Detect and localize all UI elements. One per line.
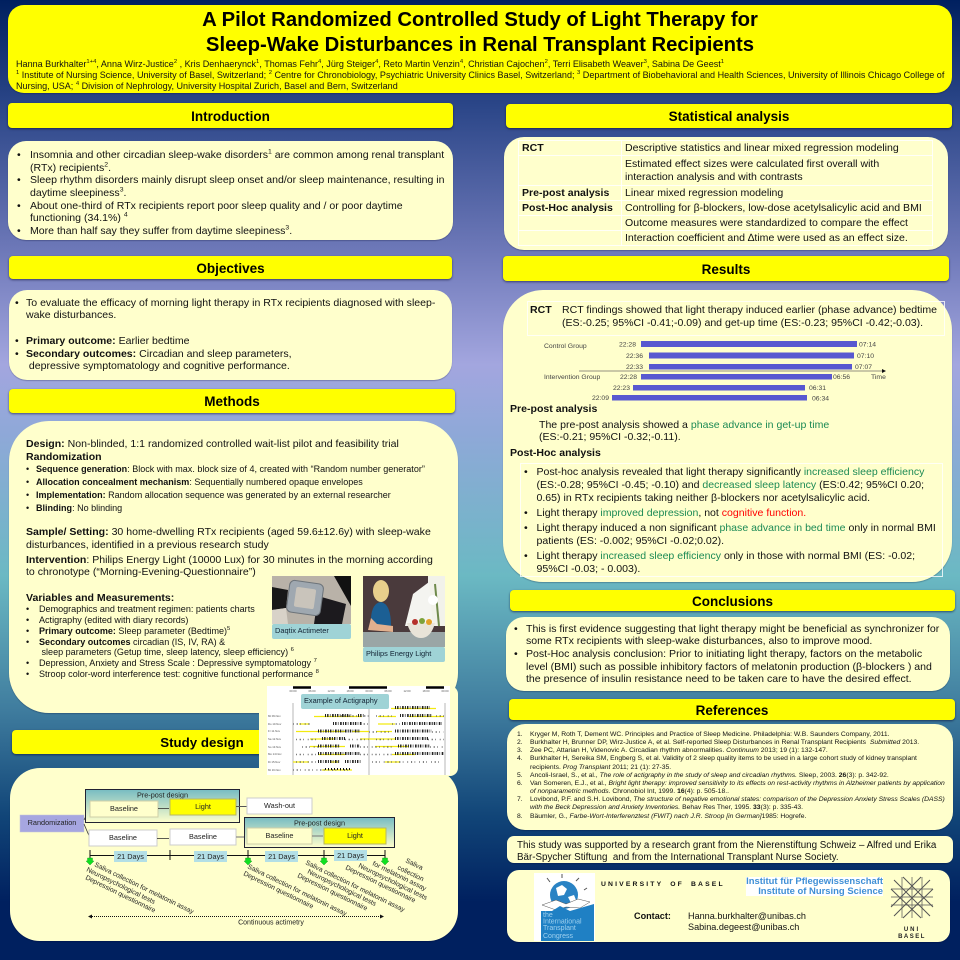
panel: funding <box>507 836 953 863</box>
21 days labels: 21 Days <box>117 852 144 861</box>
pre-post design group 1: Baseline <box>110 804 138 813</box>
caption <box>272 624 351 639</box>
actigraphy figure: 18:00 <box>422 689 430 693</box>
control baseline boxes: Baseline <box>189 832 217 841</box>
sleep timing bar chart: 22:09 <box>592 395 609 402</box>
statistical analysis table: Linear mixed regression modeling <box>625 187 783 199</box>
sleep timing bar chart: 22:36 <box>626 353 643 360</box>
reference list: 3. <box>517 747 523 754</box>
statistical analysis table: Interaction coefficient and ∆time were used as an effect size. <box>625 232 908 244</box>
reference list: Zee PC, Attarian H, Videnovic A. Circadian rhythm abnormalities. Continuum 2013; 19 (1): 132-147. <box>530 747 828 754</box>
design and randomization <box>26 438 399 463</box>
heading: statistical analysis <box>506 104 952 128</box>
measurements at second time point: Saliva collection for melatonin assay <box>246 864 348 918</box>
heading: statistical analysis: Statistical analysis <box>669 109 789 124</box>
post-hoc bullets: • <box>524 550 528 562</box>
conclusions bullets: Post-Hoc analysis conclusion: Prior to initiating light therapy, factors on the metabolic <box>526 648 922 660</box>
authors and affiliations: Hanna Burkhalter1+4, Anna Wirz-Justice2 , Kris Denhaerynck1, Thomas Fehr4, Jürg Steiger4, Reto Martin Venzin4, Christian Cajochen2, Terri Elisabeth Weaver3, Sabina De Geest1 <box>16 58 724 68</box>
intervention: Intervention: Philips Energy Light (10000 Lux) for 30 minutes in the morning according <box>26 554 433 566</box>
sleep timing bar chart: 06:34 <box>812 396 829 402</box>
reference list: 1. <box>517 731 523 738</box>
intervention <box>26 554 433 578</box>
photo: Philips Energy Light <box>363 576 445 662</box>
randomization list: Allocation concealment mechanism: Sequentially numbered opaque envelopes <box>36 477 363 487</box>
sample and setting: disturbances, identified in a previous research study <box>26 539 269 551</box>
heading: objectives: Objectives <box>196 261 265 276</box>
reference list: 2. <box>517 739 523 746</box>
introduction bullets: More than half say they suffer from daytime sleepiness3. <box>30 225 292 237</box>
randomization list: • <box>26 477 29 487</box>
actigraphy figure: 00:00 <box>442 689 449 693</box>
measurements at first time point: Depression questionnaire <box>84 875 157 915</box>
reference list: Burkhalter H, Sereika SM, Engberg S, et al. Validity of 2 sleep quality items to be used in a large cohort study of kidney transplant <box>530 755 917 762</box>
post-hoc bullets <box>524 466 936 575</box>
reference list: recipients. Prog Transplant 2011; 21 (1): 27-35. <box>530 764 671 771</box>
post-hoc bullets: Light therapy increased sleep efficiency only in those with normal BMI (ES: -0.02; <box>536 550 915 562</box>
caption: Daqtix Actimeter <box>275 626 329 635</box>
title panel <box>8 5 952 93</box>
objectives bullets: • <box>15 335 19 347</box>
actigraphy figure: 18:00 <box>346 689 354 693</box>
21 days labels: 21 Days <box>337 851 364 860</box>
study design flow diagram <box>20 789 429 926</box>
pre-post text: The pre-post analysis showed a phase advance in get-up time <box>539 418 829 430</box>
heading: results: Results <box>702 262 750 277</box>
heading: results <box>503 256 949 281</box>
reference list: 8. <box>517 813 523 820</box>
institute name <box>746 877 883 896</box>
actigraphy figure: 12:00 <box>404 689 411 693</box>
heading: study design <box>12 730 392 754</box>
pre-post design group 1: Pre-post design <box>137 790 188 800</box>
intervention: to chronotype (“Morning-Evening-Questionnaire”) <box>26 566 256 578</box>
variables list: • <box>26 604 29 614</box>
randomization list: Blinding: No blinding <box>36 503 122 513</box>
reference list: Bäumler, G., Farbe-Wort-Interferenztest (FWIT) nach J.R. Stroop [in German]1985: Hogrefe. <box>530 813 806 820</box>
sleep timing bar chart: 22:28 <box>620 374 637 381</box>
statistical analysis table <box>518 140 933 246</box>
randomization list: • <box>26 464 29 474</box>
institute name: Institut für Pflegewissenschaft <box>746 876 883 887</box>
statistical analysis table: interaction analysis and with contrasts <box>625 170 803 182</box>
title: Sleep-Wake Disturbances in Renal Transplant Recipients <box>206 34 754 56</box>
pre-post design group 1 <box>86 790 240 822</box>
post-hoc bullets: Light therapy induced a non significant phase advance in bed time only in normal BMI <box>536 522 936 534</box>
measurements at fourth time point: Neuropsychological tests <box>357 863 429 902</box>
variables list <box>26 604 319 679</box>
randomization box: Randomization <box>28 818 76 827</box>
measurements at third time point: Neuropsychological tests <box>306 869 378 908</box>
actigraphy figure: 06:00 <box>384 689 392 693</box>
continuous actimetry arrow: Continuous actimetry <box>238 920 304 926</box>
panel: introduction <box>8 141 453 240</box>
RCT finding <box>530 304 937 329</box>
post-hoc bullets: Post-hoc analysis revealed that light therapy significantly increased sleep efficiency <box>536 466 924 478</box>
introduction bullets: • <box>17 174 21 186</box>
sleep timing bar chart: 07:14 <box>859 342 876 348</box>
actigraphy figure: Sa 12.Nov <box>268 737 282 741</box>
pre-post design group 2: Pre-post design <box>294 818 345 828</box>
actigraphy figure: Do 10.Nov <box>268 722 282 726</box>
conclusions bullets: level (BMI) such as possible inhibitory factors of melatonin production (β-blockers ) and <box>526 661 932 673</box>
logo: International Transplant Congress: Congress <box>543 933 573 940</box>
post-hoc heading: Post-Hoc analysis <box>510 446 601 458</box>
conclusions bullets: This is first evidence suggesting that light therapy might be beneficial as synchronizer for <box>526 623 939 635</box>
randomization list: Implementation: Random allocation sequence was generated by an external researcher <box>36 490 391 500</box>
logo: International Transplant Congress: the <box>543 912 553 919</box>
sleep timing bar chart: 22:28 <box>619 342 636 348</box>
reference list <box>517 731 945 820</box>
reference list: with the Beck Depression and Anxiety Inventories. Behav Res Ther, 1995. 33(3): p. 335-43. <box>530 804 803 811</box>
caption <box>363 647 445 662</box>
introduction bullets: functioning (34.1%) 4 <box>30 212 128 224</box>
variables list: • <box>26 669 29 679</box>
funding text <box>517 840 936 862</box>
actigraphy figure: Fr 11.Nov <box>268 729 281 733</box>
actigraphy figure: 12:00 <box>328 689 335 693</box>
conclusions bullets <box>514 623 940 685</box>
variables heading: Variables and Measurements: <box>26 592 174 604</box>
objectives bullets: • <box>15 296 19 308</box>
actigraphy figure: Mi 16.Nov <box>268 768 281 772</box>
wash-out box <box>236 798 312 814</box>
variables list: • <box>26 637 29 647</box>
title: A Pilot Randomized Controlled Study of Light Therapy for <box>202 9 758 31</box>
funding text: Bär-Spycher Stiftung and from the International Transplant Nurse Society. <box>517 852 839 862</box>
institute name: Institute of Nursing Science <box>758 886 883 897</box>
post-hoc bullets: • <box>524 522 528 534</box>
variables list: Demographics and treatment regimen: patients charts <box>39 604 255 614</box>
sleep timing bar chart: 07:07 <box>855 364 872 371</box>
statistical analysis table: Outcome measures were standardized to compare the effect <box>625 217 908 229</box>
logo: International Transplant Congress <box>534 873 595 941</box>
heading: methods <box>9 389 455 413</box>
design and randomization: Design: Non-blinded, 1:1 randomized controlled wait-list pilot and feasibility trial <box>26 438 399 450</box>
heading: objectives <box>9 256 452 279</box>
contact emails: Sabina.degeest@unibas.ch <box>688 922 799 932</box>
measurements at first time point: Neuropsychological tests <box>85 867 157 906</box>
variables list: • <box>26 658 29 668</box>
panel: results <box>503 290 952 582</box>
objectives bullets: • <box>15 348 19 360</box>
variables list: • <box>26 626 29 636</box>
introduction bullets: Sleep rhythm disorders mainly disrupt sleep onset and/or sleep maintenance, resulting in <box>30 174 444 186</box>
logo: University of Basel emblem <box>890 876 934 940</box>
introduction bullets: (RTx) recipients2. <box>30 161 111 174</box>
reference list: Kryger M, Roth T, Dement WC. Principles and Practice of Sleep Medicine. Philadelphia: W.B. Saunders Company, 2011. <box>530 731 890 738</box>
measurements at fourth time point: collection <box>396 865 425 883</box>
variables list: Depression, Anxiety and Stress Scale : Depressive symptomatology 7 <box>39 658 317 668</box>
post-hoc bullets: patients (ES: -0.002; 95%CI -0.02;0.02). <box>536 535 724 547</box>
green arrows <box>86 858 389 865</box>
introduction bullets: daytime sleepiness3. <box>30 186 126 199</box>
control baseline boxes: Baseline <box>109 833 137 842</box>
actigraphy figure: 06:00 <box>308 689 316 693</box>
pre-post text: (ES:-0.21; 95%CI -0.32;-0.11). <box>539 431 681 443</box>
variables list: Primary outcome: Sleep parameter (Bedtime)5 <box>39 626 230 636</box>
contact label: Contact: <box>634 911 671 921</box>
sleep timing bar chart: Control Group <box>544 343 587 350</box>
variables list: • <box>26 615 29 625</box>
reference list: Burkhalter H, Brunner DP, Wirz-Justice A, et al. Self-reported Sleep Disturbances in Renal Transplant Recipients Submitted 2013. <box>530 739 919 746</box>
pre-post heading: Pre-post analysis <box>510 403 597 415</box>
contact emails: Hanna.burkhalter@unibas.ch <box>688 911 806 921</box>
post-hoc bullets: • <box>524 466 528 478</box>
sleep timing bar chart <box>544 341 886 402</box>
panel: statistical analysis <box>504 137 948 250</box>
RCT finding: (ES:-0.25; 95%CI -0.41;-0.09) and get-up time (ES:-0.23; 95%CI -0.42;-0.03). <box>562 317 923 329</box>
logo: University of Basel emblem: BASEL <box>898 934 926 940</box>
sleep timing bar chart: 22:33 <box>626 364 643 371</box>
sample and setting <box>26 526 431 551</box>
caption: Example of Actigraphy <box>304 696 378 705</box>
21 days labels <box>114 850 367 862</box>
actigraphy figure: So 13.Nov <box>268 745 282 749</box>
logo: International Transplant Congress: Transplant <box>543 925 576 932</box>
funding text: This study was supported by a research grant from the Nierenstiftung Schweiz – Alfred und Erika <box>517 840 936 850</box>
panel: methods <box>9 421 458 713</box>
objectives bullets: To evaluate the efficacy of morning light therapy in RTx recipients diagnosed with sleep- <box>26 296 435 308</box>
sleep timing bar chart: 06:56 <box>833 374 850 381</box>
sample and setting: Sample/ Setting: 30 home-dwelling RTx recipients (aged 59.6±12.6y) with sleep-wake <box>26 526 431 538</box>
reference list: 7. <box>517 796 523 803</box>
variables list: sleep parameters (Getup time, sleep latency, sleep efficiency) 6 <box>42 647 294 657</box>
panel: conclusions <box>506 617 950 691</box>
randomization list: Sequence generation: Block with max. block size of 4, created with “Random number generator” <box>36 464 425 474</box>
pre-post design group 2 <box>244 818 394 848</box>
conclusions bullets: • <box>514 648 518 660</box>
actigraphy figure: Mi 09.Nov <box>268 714 281 718</box>
variables list: Actigraphy (edited with diary records) <box>39 615 188 625</box>
introduction bullets: Insomnia and other circadian sleep-wake disorders1 are common among renal transplant <box>30 148 444 161</box>
measurements at second time point: Depression questionnaire <box>242 871 315 911</box>
randomization list: • <box>26 490 29 500</box>
actigraphy figure <box>259 686 458 776</box>
heading: study design: Study design <box>160 735 244 750</box>
post-hoc bullets: (ES:-0.28; 95%CI -0.45; -0.10) and decreased sleep latency (ES:0.42; 95%CI 0.20; <box>536 479 924 491</box>
timeline <box>90 850 385 860</box>
authors and affiliations: 1 Institute of Nursing Science, University of Basel, Switzerland; 2 Centre for Chronobiology, Psychiatric University Clinics Basel, Switzerland; 3 Department of Biobehavioral and Health Sciences, University of Illinois Chicago College of <box>16 69 944 80</box>
authors and affiliations <box>16 58 944 91</box>
conclusions bullets: some RTx recipients with sleep-wake disturbances, also to improve mood. <box>526 635 872 647</box>
variables list: Stroop color-word interference test: cognitive functional performance 8 <box>39 669 319 679</box>
panel: references <box>507 724 953 830</box>
pre-post text <box>539 418 829 443</box>
branch arrows <box>84 808 90 838</box>
heading: references: References <box>696 703 768 718</box>
logo: University of Basel emblem: UNI <box>904 927 920 933</box>
caption: Philips Energy Light <box>366 649 431 658</box>
sleep timing bar chart: Time <box>871 374 886 381</box>
measurements at fourth time point: Depression questionnaire <box>344 865 417 905</box>
heading: methods: Methods <box>204 394 260 409</box>
reference list: 4. <box>517 755 523 762</box>
introduction bullets: • <box>17 225 21 237</box>
measurements at first time point: Saliva collection for melatonin assay <box>93 862 195 916</box>
actigraphy figure: 00:00 <box>366 689 373 693</box>
photo: Daqtix actimeter <box>272 576 351 639</box>
21 days labels: 21 Days <box>268 852 295 861</box>
reference list: of nonparametric methods. Chronobiol Int, 1999. 16(4): p. 505-18.. <box>530 788 729 795</box>
heading: conclusions: Conclusions <box>692 594 773 609</box>
statistical analysis table: Descriptive statistics and linear mixed regression modeling <box>625 142 899 154</box>
pre-post design group 2: Baseline <box>266 831 294 840</box>
contact emails <box>688 911 806 932</box>
conclusions bullets: the presence of insulin resistance need to be taken care to have the desired effect. <box>526 673 912 685</box>
randomization list <box>26 464 425 513</box>
sleep timing bar chart: 22:23 <box>613 385 630 392</box>
sleep timing bar chart: 07:10 <box>857 353 874 360</box>
reference list: Lovibond, P.F. and S.H. Lovibond, The structure of negative emotional states: comparison of the Depression Anxiety Stress Scales (DASS) <box>530 796 945 803</box>
actigraphy figure: 00:00 <box>290 689 297 693</box>
statistical analysis table: Estimated effect sizes were calculated first overall with <box>625 158 879 170</box>
reference list: 5. <box>517 772 523 779</box>
measurements at fourth time point: Saliva <box>404 858 424 872</box>
logo: International Transplant Congress: International <box>543 918 582 926</box>
introduction bullets: • <box>17 200 21 212</box>
objectives bullets: Secondary outcomes: Circadian and sleep parameters, <box>26 348 292 360</box>
pre-post design group 1: Light <box>195 802 211 811</box>
reference list: Van Someren, E.J., et al., Bright light therapy: improved sensitivity to its effects on rest-activity rhythms in Alzheimer patients by application <box>530 780 945 787</box>
statistical analysis table: RCT <box>522 142 544 154</box>
design and randomization: Randomization <box>26 451 102 463</box>
sleep timing bar chart: 06:31 <box>809 385 826 392</box>
statistical analysis table: Pre-post analysis <box>522 187 609 199</box>
introduction bullets: • <box>17 149 21 161</box>
post-hoc bullets: 95%CI -0.03; - 0.003). <box>536 563 640 575</box>
objectives bullets: Primary outcome: Earlier bedtime <box>26 335 190 347</box>
heading: conclusions <box>510 590 955 611</box>
measurements at fourth time point: for melatonin assay <box>371 861 428 893</box>
statistical analysis table: Controlling for β-blockers, low-dose acetylsalicylic acid and BMI <box>625 202 922 214</box>
RCT finding: RCT findings showed that light therapy induced earlier (phase advance) bedtime <box>562 304 937 316</box>
control baseline boxes <box>89 829 246 846</box>
panel: objectives <box>9 290 452 380</box>
introduction bullets <box>17 148 444 237</box>
actigraphy figure: Di 15.Nov <box>268 760 281 764</box>
reference list: 6. <box>517 780 523 787</box>
authors and affiliations: Nursing, USA; 4 Division of Nephrology, University Hospital Zurich, Basel and Bern, Switzerland <box>16 80 398 90</box>
wash-out box: Wash-out <box>264 801 295 810</box>
actigraphy figure: Mo 14.Nov <box>268 752 282 756</box>
post-hoc bullets: Light therapy improved depression, not cognitive function. <box>536 507 806 519</box>
reference list: Ancoli-Israel, S., et al., The role of actigraphy in the study of sleep and circadian rhythms. Sleep, 2003. 26(3): p. 342-92. <box>530 772 889 779</box>
randomization box <box>20 815 84 832</box>
variables list: Secondary outcomes circadian (IS, IV, RA) & <box>39 637 225 647</box>
objectives bullets <box>15 296 435 372</box>
panel: study design <box>10 768 458 941</box>
randomization list: • <box>26 503 29 513</box>
panel: logos and contact <box>507 870 950 942</box>
university of Basel wordmark: UNIVERSITY OF BASEL <box>601 881 725 888</box>
objectives bullets: depressive symptomatology and cognitive performance. <box>29 360 290 372</box>
continuous actimetry arrow <box>88 914 384 926</box>
title <box>202 9 758 56</box>
heading: introduction <box>8 103 453 128</box>
post-hoc bullets: • <box>524 507 528 519</box>
sleep timing bar chart: Intervention Group <box>544 374 601 381</box>
21 days labels: 21 Days <box>197 852 224 861</box>
pre-post design group 2: Light <box>347 831 363 840</box>
introduction bullets: About one-third of RTx recipients report poor sleep quality and / or poor daytime <box>30 200 403 212</box>
heading: references <box>509 699 955 720</box>
caption <box>301 694 389 709</box>
statistical analysis table: Post-Hoc analysis <box>522 202 613 214</box>
objectives bullets: wake disturbances. <box>26 309 116 321</box>
conclusions bullets: • <box>514 623 518 635</box>
measurements at third time point: Saliva collection for melatonin assay <box>304 860 406 914</box>
measurements at third time point: Depression questionnaire <box>296 873 369 913</box>
RCT finding: RCT <box>530 304 552 316</box>
post-hoc bullets: 0.65) in RTx recipients taking neither β-blockers nor acetylsalicylic acid. <box>536 492 870 504</box>
heading: introduction: Introduction <box>191 109 270 124</box>
